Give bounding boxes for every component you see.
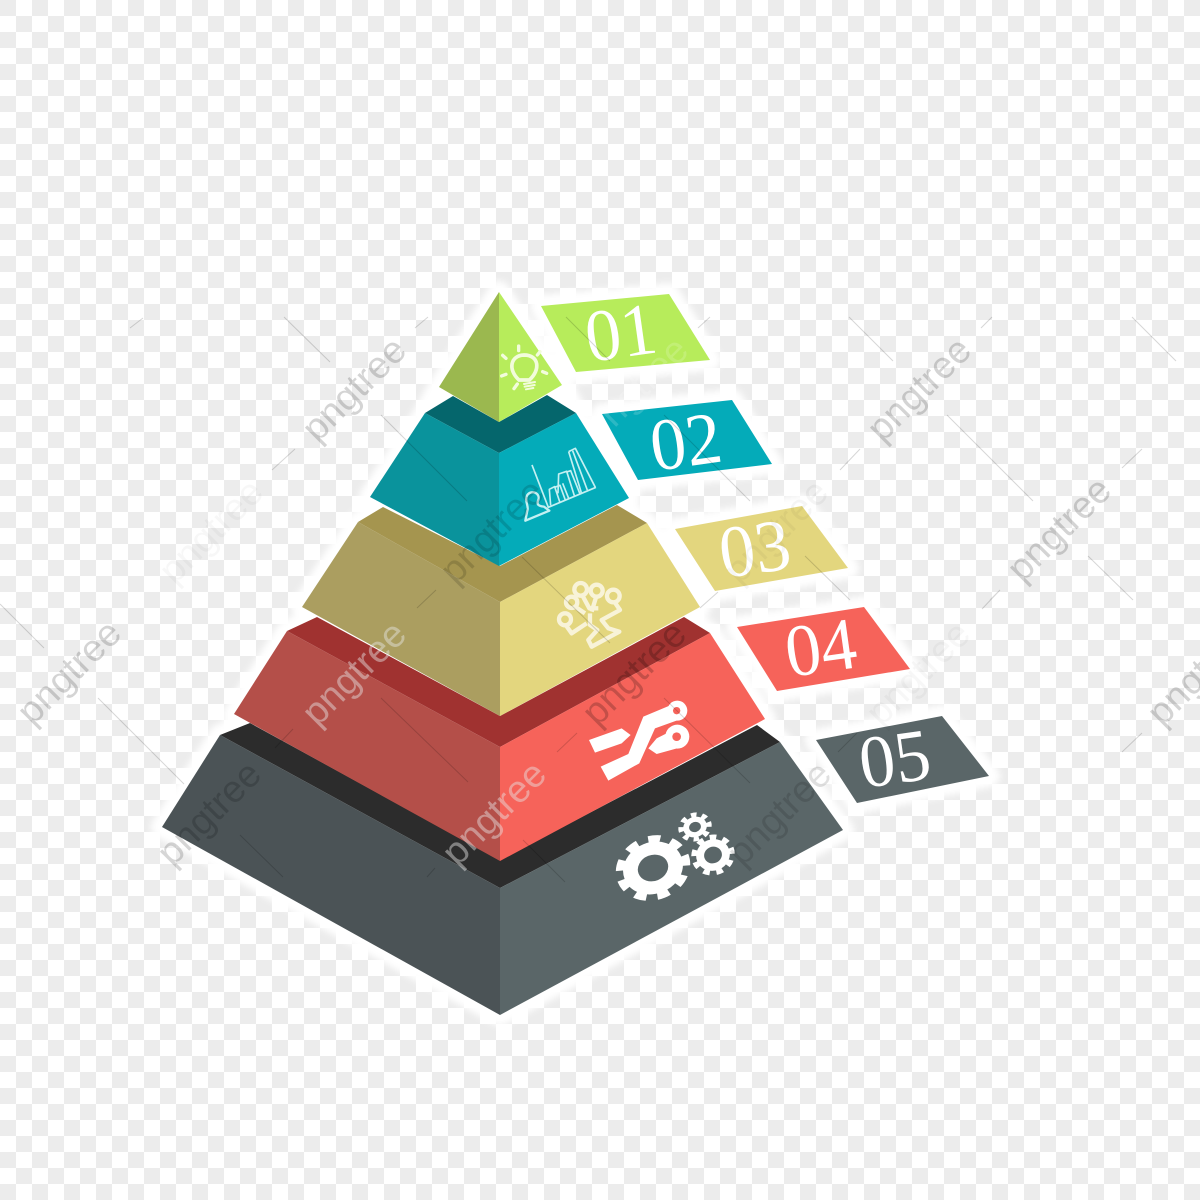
watermark text: pngtree [151,471,272,592]
label 03: 03 [714,502,796,594]
watermark strokes [0,317,1176,882]
tier 4: red [234,617,765,861]
watermark text: pngtree [294,613,415,734]
label 02: 02 [645,395,727,487]
label 05 [816,712,989,804]
icon: tree of circuit nodes [559,583,620,647]
watermark text: pngtree [432,471,553,592]
watermark text: pngtree [716,471,837,592]
watermark text: pngtree [149,753,270,874]
label 05: 05 [854,712,936,804]
label 02 [602,395,772,487]
icon: splitting circuit arrows [589,701,689,781]
tier 1: green apex [439,292,562,422]
watermark text: pngtree [294,329,415,450]
watermark text: pngtree [574,613,695,734]
icon: three gears [612,811,737,906]
watermark text: pngtree [719,753,840,874]
label 03 [675,502,848,594]
watermark text: pngtree [9,612,130,733]
label 04 [737,601,910,693]
white halo around pyramid and labels [162,292,989,1015]
watermark text: pngtree [434,753,555,874]
watermark text: pngtree [999,469,1120,590]
icon: person and rising bar chart [525,448,596,521]
icon: light bulb [502,346,547,389]
label 01: 01 [580,286,662,378]
label 01 [541,286,710,378]
tier 2: teal [370,395,629,566]
watermark text: pngtree [858,613,979,734]
watermark text: pngtree [859,329,980,450]
tier 5: base of pyramid, dark grey [162,723,843,1015]
watermark text: pngtree [576,329,697,450]
label 04: 04 [780,601,862,693]
watermark text [9,329,1200,874]
tier 3: sand yellow [302,505,700,716]
